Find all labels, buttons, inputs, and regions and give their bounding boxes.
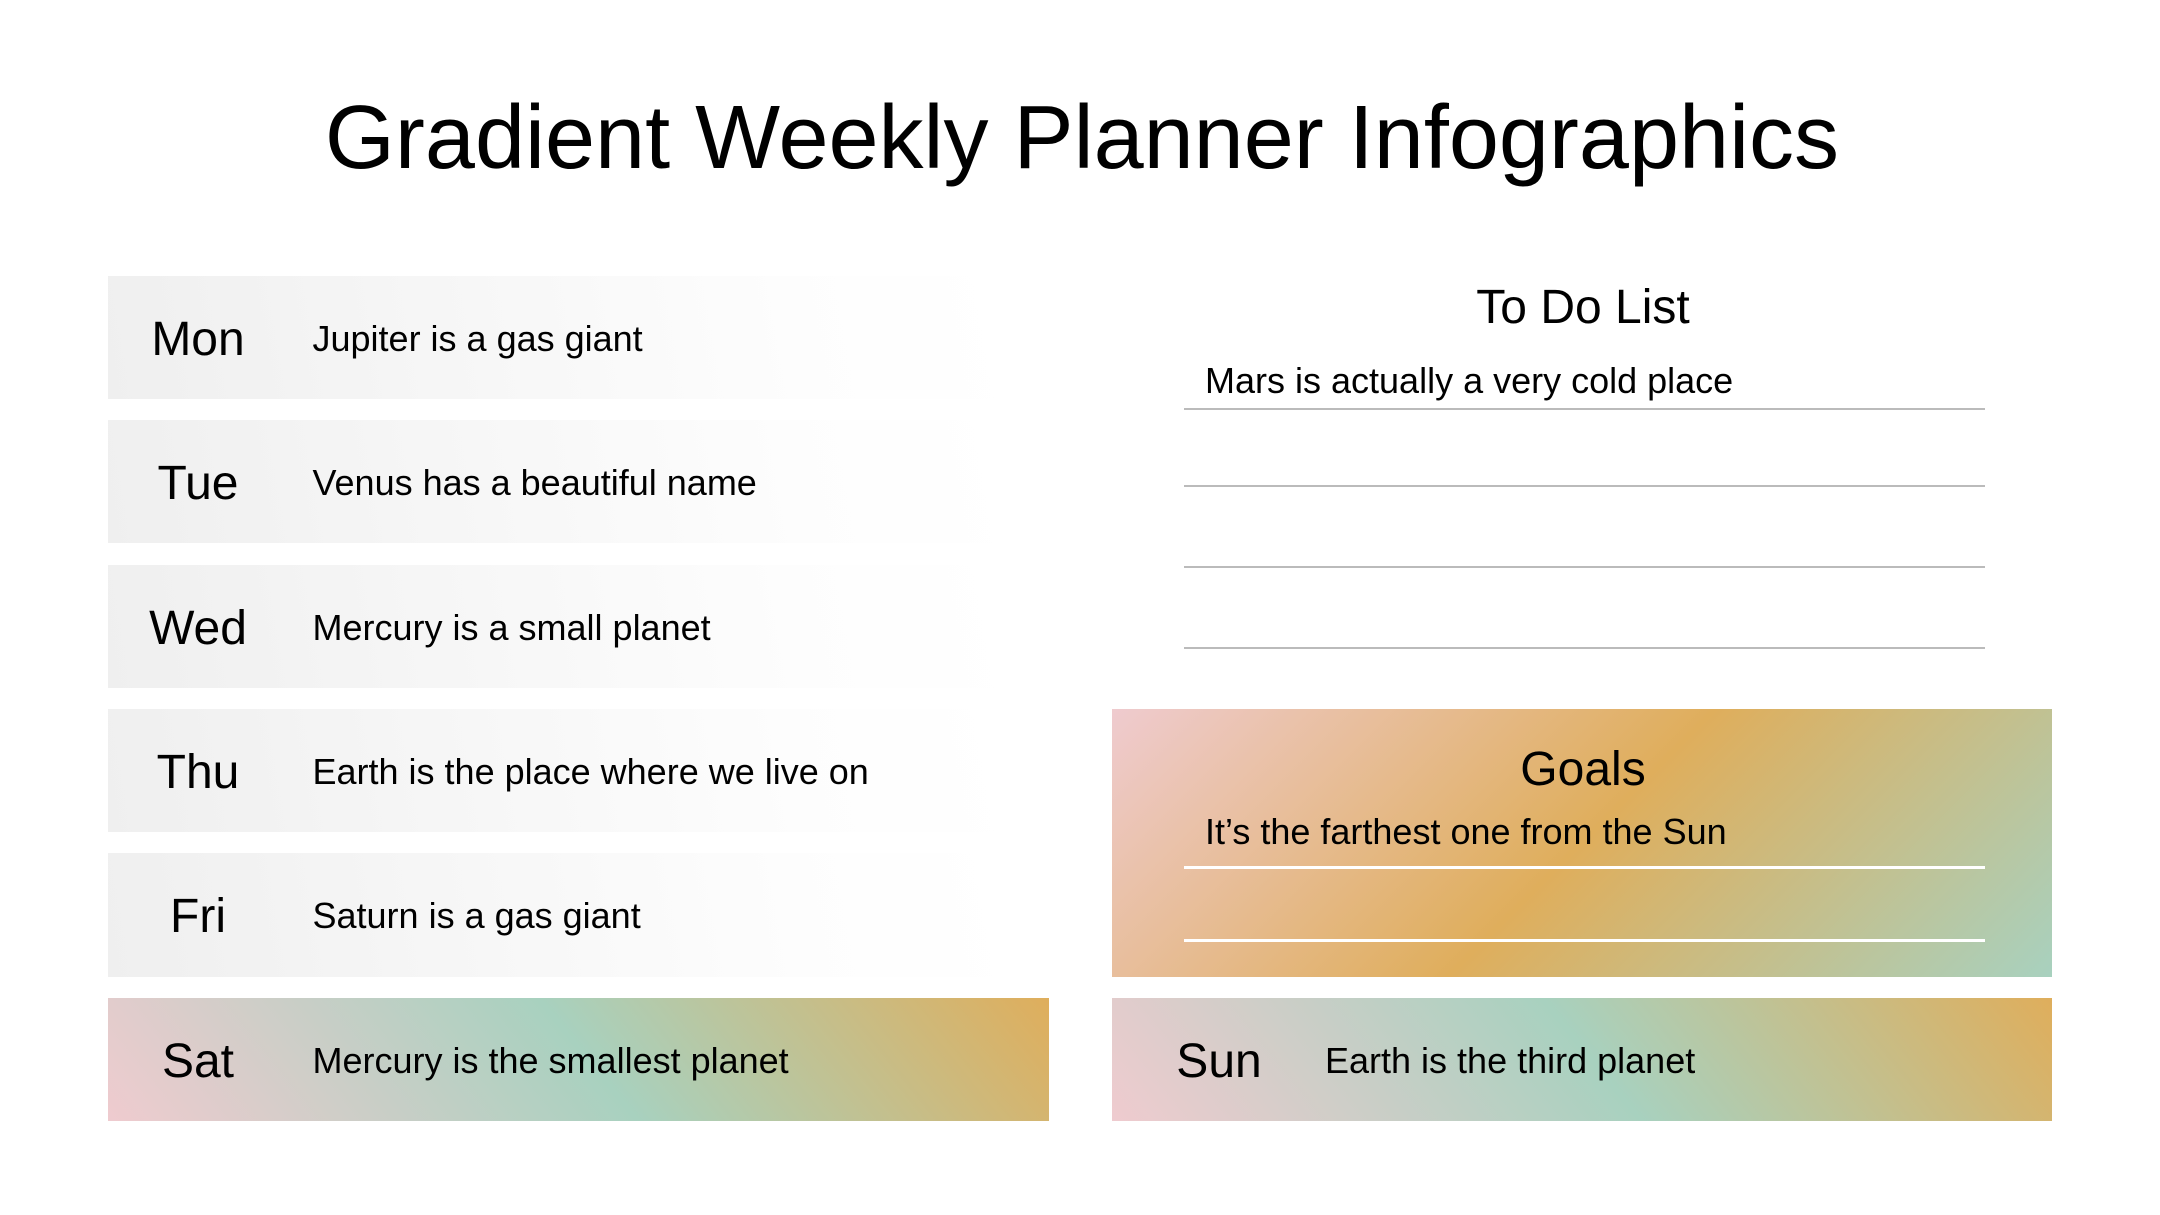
panel: Wednesday row: Wed [149,602,247,655]
goal line 2 [1184,939,1985,942]
panel: Sunday row [1112,998,2052,1121]
panel: Goals [1112,709,2052,977]
panel: Tuesday row [108,420,1049,543]
goal line 1 [1184,866,1985,869]
text: goal item: It’s the farthest one from the Sun [1205,810,1727,852]
panel: Thursday row [108,709,1049,832]
panel: Sunday row: Earth is the third planet [1325,1040,1695,1081]
panel: Saturday row: Sat [162,1035,234,1088]
to do lines [1184,408,1985,649]
text: to do item: Mars is actually a very cold place [1205,360,1733,400]
panel: Tuesday row: Venus has a beautiful name [312,462,757,503]
panel: Sunday row: Sun [1176,1035,1262,1088]
panel: Friday row: Saturn is a gas giant [312,895,641,936]
panel: Wednesday row [108,565,1049,688]
panel: Friday row: Fri [170,890,226,943]
panel: Wednesday row: Mercury is a small planet [312,607,711,648]
panel: Monday row: Mon [151,313,245,366]
panel: Saturday row [108,998,1049,1121]
heading: To Do List: To Do List [1476,280,1690,334]
panel: Thursday row: Thu [157,746,239,799]
heading: Goals: Goals [1520,743,1646,796]
panel: Monday row [108,276,1049,399]
panel: Saturday row: Mercury is the smallest planet [312,1040,789,1081]
panel: Tuesday row: Tue [158,457,238,510]
panel: Friday row [108,853,1049,977]
panel: Thursday row: Earth is the place where we live on [312,751,869,792]
title: Gradient Weekly Planner Infographics [325,88,1839,188]
panel: Monday row: Jupiter is a gas giant [312,318,643,359]
